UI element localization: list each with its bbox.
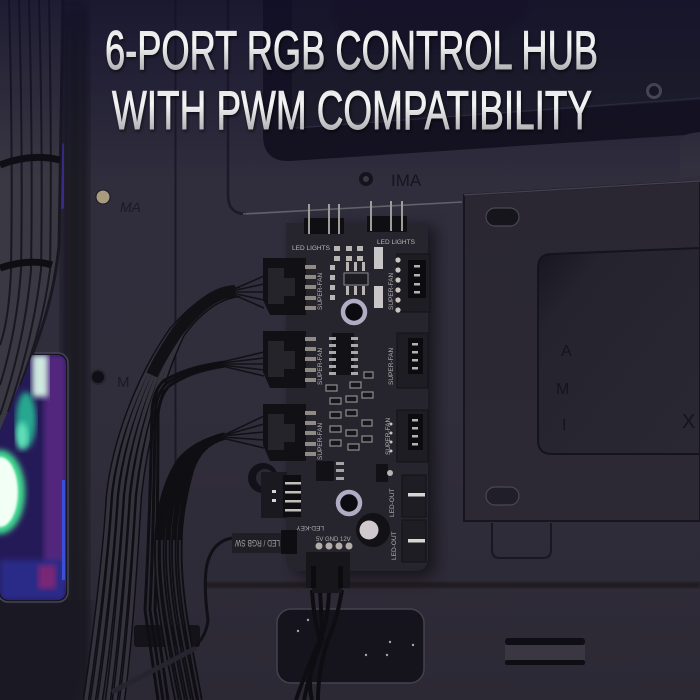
- blue glow line: [88, 522, 105, 700]
- silk labels: LED-OUT: [389, 488, 396, 517]
- silk labels: SUPER-FAN: [385, 417, 392, 455]
- power lead bundle: [296, 590, 342, 700]
- LED/RGB switch: [232, 530, 297, 554]
- silk labels: SUPER-FAN: [317, 272, 324, 310]
- left fan connectors: [263, 258, 306, 461]
- LED switch lead: [188, 538, 232, 652]
- silk labels: [296, 272, 398, 560]
- mounting bracket: A: [561, 343, 572, 360]
- pads row: [316, 542, 352, 550]
- ribbon cable two: [145, 352, 264, 700]
- right LED sockets: [402, 475, 426, 562]
- capacitor: [356, 513, 390, 547]
- lower cutouts: [134, 609, 585, 683]
- left RGB window: [0, 353, 68, 602]
- embossed IMA marks: [91, 171, 422, 391]
- horizontal chassis ledge: [205, 582, 700, 588]
- mounting bracket: [464, 181, 700, 558]
- embossed IMA marks: M: [117, 374, 130, 391]
- left header pins: [305, 265, 316, 456]
- brass standoff: [96, 190, 110, 204]
- ribbon cable three: [157, 416, 264, 700]
- right fan connectors: [390, 254, 430, 462]
- silk labels: 5V GND 12V: [316, 537, 351, 543]
- ribbon cable one: [86, 276, 264, 700]
- purple side glow: [57, 143, 64, 209]
- left small connector: [261, 472, 301, 518]
- embossed IMA marks: MA: [120, 199, 141, 215]
- silk labels: SUPER-FAN: [317, 422, 324, 460]
- silk labels: LED-KEY: [296, 524, 324, 531]
- silk labels: SUPER-FAN: [388, 347, 395, 385]
- power connector: [306, 552, 350, 593]
- black fan cables: [86, 276, 342, 700]
- LED pin headers: LED LIGHTS: [292, 245, 331, 252]
- LED/RGB switch: LED / RGB SW: [235, 538, 280, 548]
- fold highlight behind hub: [243, 202, 462, 214]
- cable grommet: [248, 463, 278, 493]
- LED pin headers: [292, 201, 416, 252]
- top dark vignette: [0, 0, 700, 180]
- silk labels: SUPER-FAN: [388, 272, 395, 310]
- top vent recess: [228, 0, 700, 214]
- LED pin headers: LED LIGHTS: [377, 239, 416, 246]
- left cable bundle: [0, 0, 64, 430]
- surface mount components: [316, 246, 393, 482]
- mounting holes: [338, 301, 365, 514]
- silk labels: LED-OUT: [391, 531, 398, 560]
- control hub circuit board: [232, 201, 435, 593]
- mounting bracket: I: [562, 417, 566, 434]
- title: [105, 19, 598, 141]
- embossed IMA marks: IMA: [391, 171, 422, 190]
- mounting bracket: X: [682, 411, 695, 433]
- mounting bracket: M: [556, 381, 569, 398]
- silk labels: SUPER-FAN: [317, 347, 324, 385]
